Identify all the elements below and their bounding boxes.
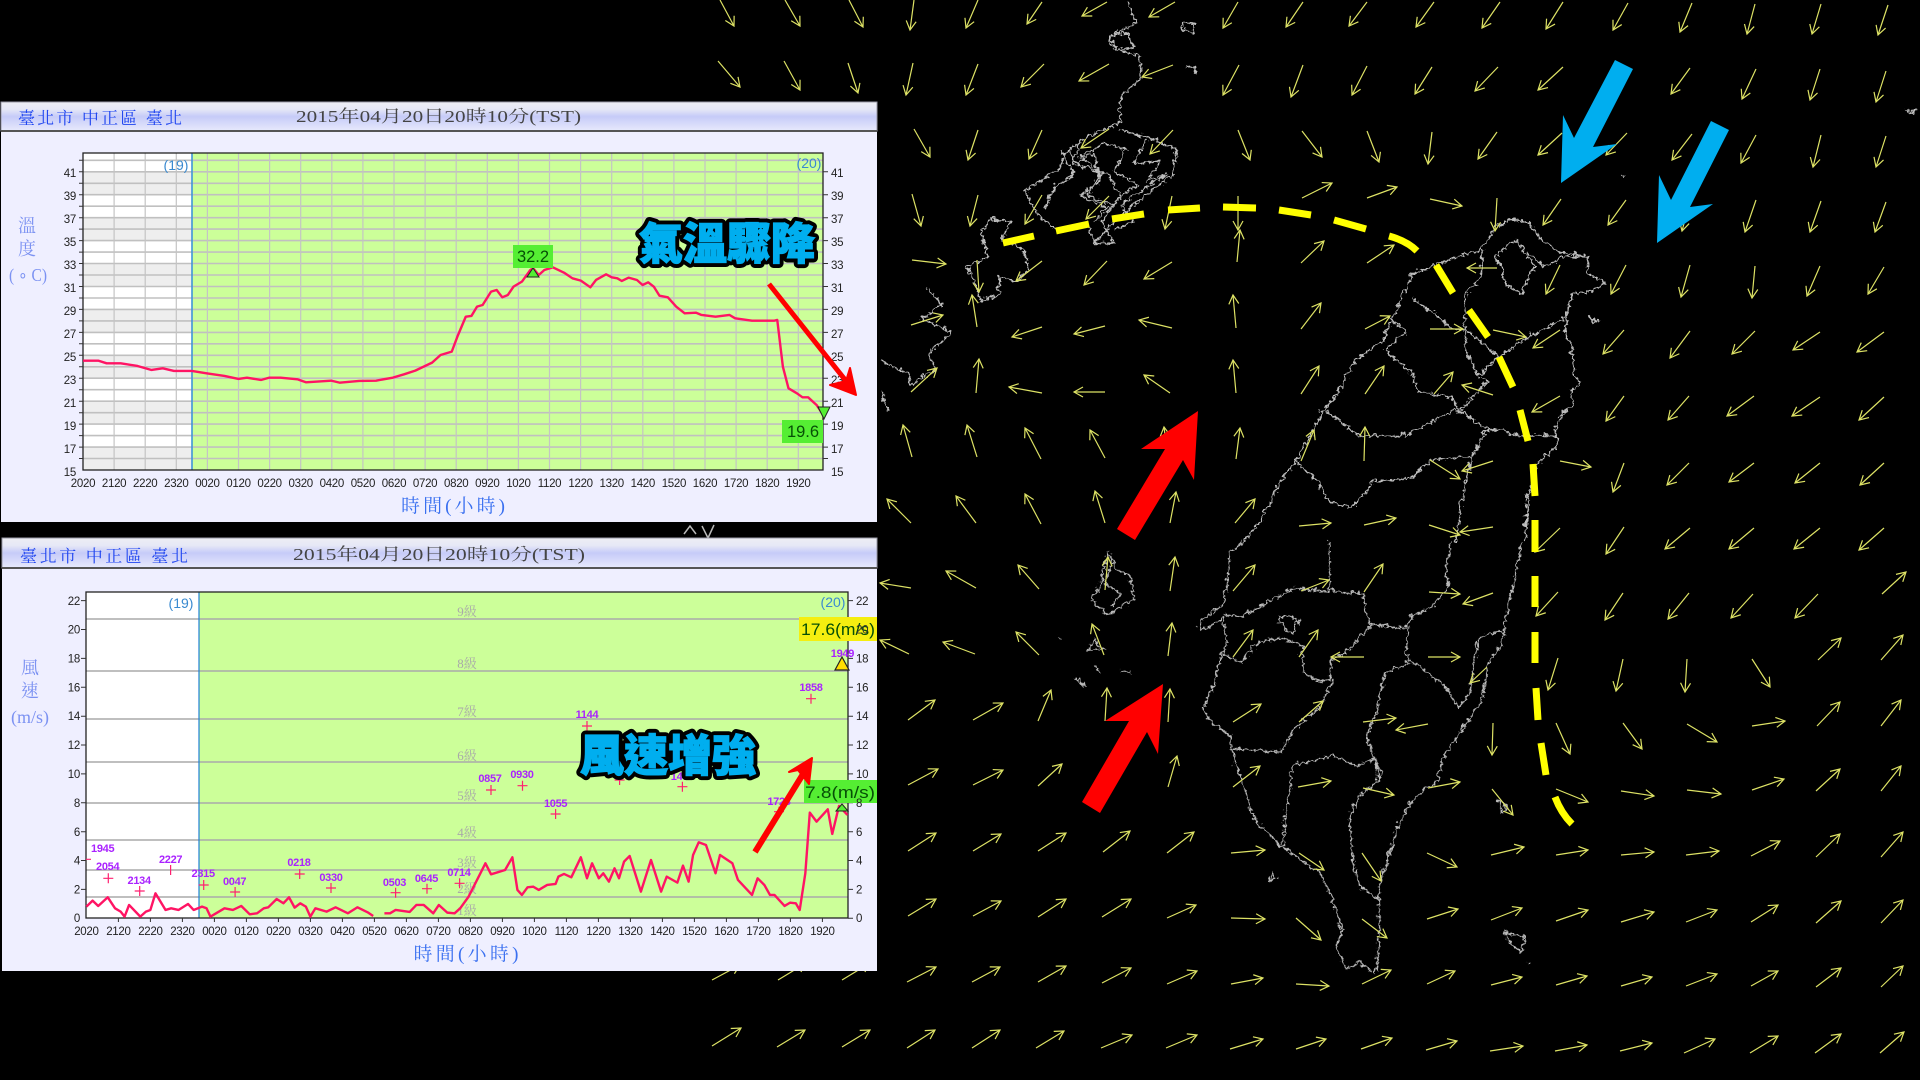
map: north part [880, 0, 1913, 540]
y axis labels: wind [68, 596, 869, 925]
callout: temperature plunge: 氣溫驟降 [639, 220, 815, 269]
max gust label 17.6: 17.6(m/s) [801, 620, 875, 639]
y axis title: wind: 速 [21, 681, 39, 701]
max gust label 17.6: 20 [856, 624, 868, 636]
min marker 19.6: 19.6 [787, 423, 819, 441]
panel: wind speed chart [2, 538, 877, 971]
gust time labels: 1144 [576, 709, 600, 721]
y axis title: wind: 風 [21, 658, 39, 678]
y axis labels: wind: 14 [856, 711, 869, 723]
y axis labels: wind: 18 [856, 654, 868, 666]
gust triangle marker [835, 657, 849, 670]
beaufort grade labels: 3級 [457, 855, 477, 870]
x axis labels: temperature: 2120 [102, 478, 126, 490]
day labels [169, 594, 845, 611]
gust time labels: 0645 [415, 873, 438, 885]
y axis labels: temperature: 23 [64, 375, 76, 387]
y axis labels: temperature: 19 [64, 421, 76, 433]
y axis labels: temperature: 33 [64, 260, 76, 272]
y axis labels: temperature: 35 [64, 237, 76, 249]
gust time labels: 1945 [91, 843, 115, 855]
x axis labels: temperature: 0920 [475, 478, 499, 490]
wind speed line [86, 806, 847, 917]
plot area: temperature [79, 153, 828, 470]
day labels: (20) [797, 155, 821, 171]
y axis labels: temperature: 25 [64, 352, 76, 364]
y axis labels: wind: 16 [856, 682, 868, 694]
x axis labels: temperature: 1020 [506, 478, 531, 490]
y axis labels: temperature: 17 [831, 444, 843, 456]
y axis labels: temperature: 41 [64, 168, 76, 180]
beaufort grade labels: 9級 [457, 604, 477, 619]
x axis labels: wind: 0220 [266, 926, 291, 938]
x axis labels: temperature: 1620 [693, 478, 717, 490]
y axis labels: wind: 2 [74, 884, 80, 896]
y axis labels: wind: 14 [68, 711, 81, 723]
y axis labels: temperature: 25 [831, 352, 843, 364]
x axis labels: temperature: 1220 [568, 478, 593, 490]
beaufort grade labels: 2級 [457, 881, 477, 896]
y axis labels: temperature: 29 [831, 306, 843, 318]
max marker 32.2 [513, 245, 553, 277]
panel: temperature chart [1, 102, 877, 522]
beaufort grade labels: 5級 [457, 788, 477, 803]
x axis labels: temperature: 0220 [257, 478, 282, 490]
gust time labels: 2054 [96, 861, 121, 873]
y axis labels: wind: 4 [856, 856, 863, 868]
y axis labels: wind: 4 [74, 856, 81, 868]
gust time labels: 0218 [287, 857, 311, 869]
gust time labels: 0503 [383, 877, 406, 889]
temperature line [83, 267, 823, 415]
callout: temperature plunge: 氣溫驟降 [639, 220, 815, 269]
x axis labels: wind: 0820 [458, 926, 483, 938]
x axis labels: wind: 1520 [682, 926, 707, 938]
callout: wind speed increase: 風速增強 [580, 732, 756, 781]
x axis labels: temperature: 0020 [195, 478, 220, 490]
x axis labels: temperature: 1320 [600, 478, 624, 490]
day labels: (19) [164, 157, 188, 173]
gust time labels: 2134 [128, 875, 152, 887]
beaufort grade labels: 8級 [457, 656, 477, 671]
x axis labels: wind: 1020 [522, 926, 547, 938]
map: south part [1056, 540, 1526, 972]
x axis labels: wind [74, 926, 835, 938]
arrow: temperature drop [769, 284, 856, 395]
beaufort grade labels: 4級 [457, 825, 477, 840]
y axis labels: temperature: 31 [831, 283, 843, 295]
arrow: red southwesterly wind 2 [1082, 684, 1163, 813]
wind vector arrows [712, 0, 1906, 1053]
gust time labels: 0047 [223, 876, 246, 888]
gust time labels: 1454 [671, 771, 695, 783]
x axis labels: wind: 0720 [426, 926, 451, 938]
map fragment between the two chart panels [684, 525, 714, 538]
x axis labels: wind: 0320 [298, 926, 323, 938]
y axis labels: wind: 12 [856, 740, 868, 752]
x axis labels: temperature: 0420 [320, 478, 344, 490]
y axis labels: temperature [64, 168, 843, 479]
x axis labels: wind: 2120 [106, 926, 131, 938]
gust time labels: 1949 [831, 648, 854, 660]
y axis labels: temperature: 39 [831, 191, 843, 203]
y axis labels: wind: 6 [74, 827, 80, 839]
x axis labels: wind: 2320 [170, 926, 195, 938]
callout: wind speed increase: 風速增強 [580, 732, 756, 781]
y axis labels: wind: 0 [856, 913, 862, 925]
y axis labels: wind: 20 [68, 624, 80, 636]
gust time labels: 1055 [544, 798, 567, 810]
yellow dashed front line [1003, 207, 1572, 824]
beaufort grade labels [457, 604, 477, 918]
y axis title: temperature [9, 216, 47, 286]
y axis labels: temperature: 15 [831, 467, 843, 479]
y axis labels: temperature: 31 [64, 283, 76, 295]
current wind label 7.8: 7.8(m/s) [805, 783, 875, 802]
y axis title: temperature: ( ∘ C) [9, 265, 47, 286]
y axis labels: wind: 12 [68, 740, 80, 752]
arrow: blue northeasterly wind 1 [1561, 60, 1633, 183]
x axis labels: temperature: 1520 [662, 478, 686, 490]
x axis labels: wind: 0020 [202, 926, 227, 938]
y axis labels: temperature: 33 [831, 260, 843, 272]
x axis labels: temperature: 2020 [71, 478, 95, 490]
x axis labels: temperature: 1820 [755, 478, 779, 490]
x axis labels: wind: 1920 [810, 926, 835, 938]
beaufort grade labels: 1級 [457, 903, 477, 918]
gust time labels: 1858 [799, 682, 823, 694]
y axis labels: temperature: 15 [64, 467, 76, 479]
y axis labels: temperature: 29 [64, 306, 76, 318]
x axis labels: temperature: 1720 [724, 478, 748, 490]
x axis labels: wind: 0120 [234, 926, 259, 938]
x axis labels: wind: 1220 [586, 926, 611, 938]
y axis labels: wind: 22 [68, 596, 80, 608]
min marker 19.6 [782, 407, 830, 443]
y axis labels: wind: 8 [74, 798, 80, 810]
gust time labels: 1515 [705, 732, 729, 744]
x axis labels: temperature [71, 478, 810, 490]
x axis labels: wind: 2220 [138, 926, 163, 938]
panel header: temperature: 臺北市 中正區 臺北 [18, 108, 182, 128]
arrow: wind increase [755, 758, 812, 852]
x axis labels: temperature: 0320 [289, 478, 313, 490]
y axis labels: temperature: 35 [831, 237, 843, 249]
y axis labels: wind: 0 [74, 913, 80, 925]
y axis labels: temperature: 27 [831, 329, 843, 341]
y axis title: temperature: 溫 [18, 216, 36, 236]
current wind label 7.8 [804, 780, 877, 811]
y axis labels: temperature: 37 [831, 214, 843, 226]
y axis labels: temperature: 37 [64, 214, 76, 226]
x axis labels: temperature: 2220 [133, 478, 157, 490]
x axis labels: temperature: 0120 [226, 478, 251, 490]
beaufort grade labels: 7級 [457, 704, 477, 719]
x axis labels: wind: 0420 [330, 926, 355, 938]
panel header: wind: 2015年04月20日20時10分(TST) [293, 544, 585, 564]
x axis labels: wind: 0920 [490, 926, 515, 938]
y axis labels: temperature: 21 [64, 398, 76, 410]
y axis labels: wind: 18 [68, 654, 80, 666]
gust time labels: 0857 [478, 773, 502, 785]
panel header: temperature: 2015年04月20日20時10分(TST) [296, 106, 581, 126]
panel header: temperature [1, 102, 877, 132]
day labels [164, 155, 821, 173]
gust time labels: 1723 [767, 796, 791, 808]
x axis labels: temperature: 0620 [382, 478, 406, 490]
x axis labels: wind: 1620 [714, 926, 739, 938]
y axis labels: temperature: 39 [64, 191, 76, 203]
y axis title: wind: (m/s) [11, 707, 49, 728]
arrow: blue northeasterly wind 2 [1657, 121, 1729, 243]
x axis labels: wind: 1820 [778, 926, 803, 938]
y axis labels: wind: 2 [856, 884, 862, 896]
x axis title: wind: 時間(小時) [414, 943, 518, 965]
gust markers [86, 694, 816, 898]
x axis labels: wind: 1420 [650, 926, 675, 938]
y axis labels: temperature: 27 [64, 329, 76, 341]
x axis labels: wind: 1720 [746, 926, 771, 938]
y axis labels: wind: 16 [68, 682, 80, 694]
current wind label 7.8: 8 [856, 798, 862, 810]
y axis labels: temperature: 17 [64, 444, 76, 456]
gust time labels: 2315 [192, 868, 215, 880]
gust time labels: 0930 [510, 769, 534, 781]
map: Taiwan coastline and county borders [880, 0, 1913, 972]
x axis labels: temperature: 0820 [444, 478, 468, 490]
x axis labels: wind: 1320 [618, 926, 643, 938]
x axis labels: temperature: 1920 [786, 478, 810, 490]
gust time labels: 2227 [159, 854, 182, 866]
x axis title: temperature: 時間(小時) [401, 495, 505, 517]
y axis labels: temperature: 21 [831, 398, 843, 410]
x axis labels: wind: 1120 [555, 926, 578, 938]
beaufort grade labels: 6級 [457, 748, 477, 763]
y axis title: temperature: 度 [18, 239, 36, 259]
x axis labels: temperature: 2320 [164, 478, 188, 490]
y axis title: wind [11, 658, 49, 728]
y axis labels: temperature: 19 [831, 421, 843, 433]
arrow: red southwesterly wind 1 [1117, 411, 1198, 540]
x axis labels: temperature: 0720 [413, 478, 437, 490]
y axis labels: temperature: 41 [831, 168, 843, 180]
plot area: wind [81, 592, 853, 922]
y axis labels: wind: 22 [856, 596, 868, 608]
panel header: wind: 臺北市 中正區 臺北 [20, 546, 188, 566]
x axis labels: wind: 2020 [74, 926, 99, 938]
y axis labels: wind: 10 [856, 769, 868, 781]
y axis labels: wind: 10 [68, 769, 80, 781]
day labels: (19) [169, 595, 193, 611]
day labels: (20) [821, 594, 845, 610]
gust time labels: 0714 [447, 867, 472, 879]
x axis labels: wind: 0620 [394, 926, 419, 938]
x axis labels: temperature: 1120 [538, 478, 561, 490]
gust time labels: 0330 [319, 872, 343, 884]
x axis labels: temperature: 1420 [631, 478, 655, 490]
gust time labels [91, 648, 854, 889]
x axis labels: wind: 0520 [362, 926, 387, 938]
y axis labels: temperature: 23 [831, 375, 843, 387]
panel header: wind [2, 538, 877, 569]
x axis labels: temperature: 0520 [351, 478, 375, 490]
y axis labels: wind: 6 [856, 827, 862, 839]
max marker 32.2: 32.2 [517, 248, 549, 266]
